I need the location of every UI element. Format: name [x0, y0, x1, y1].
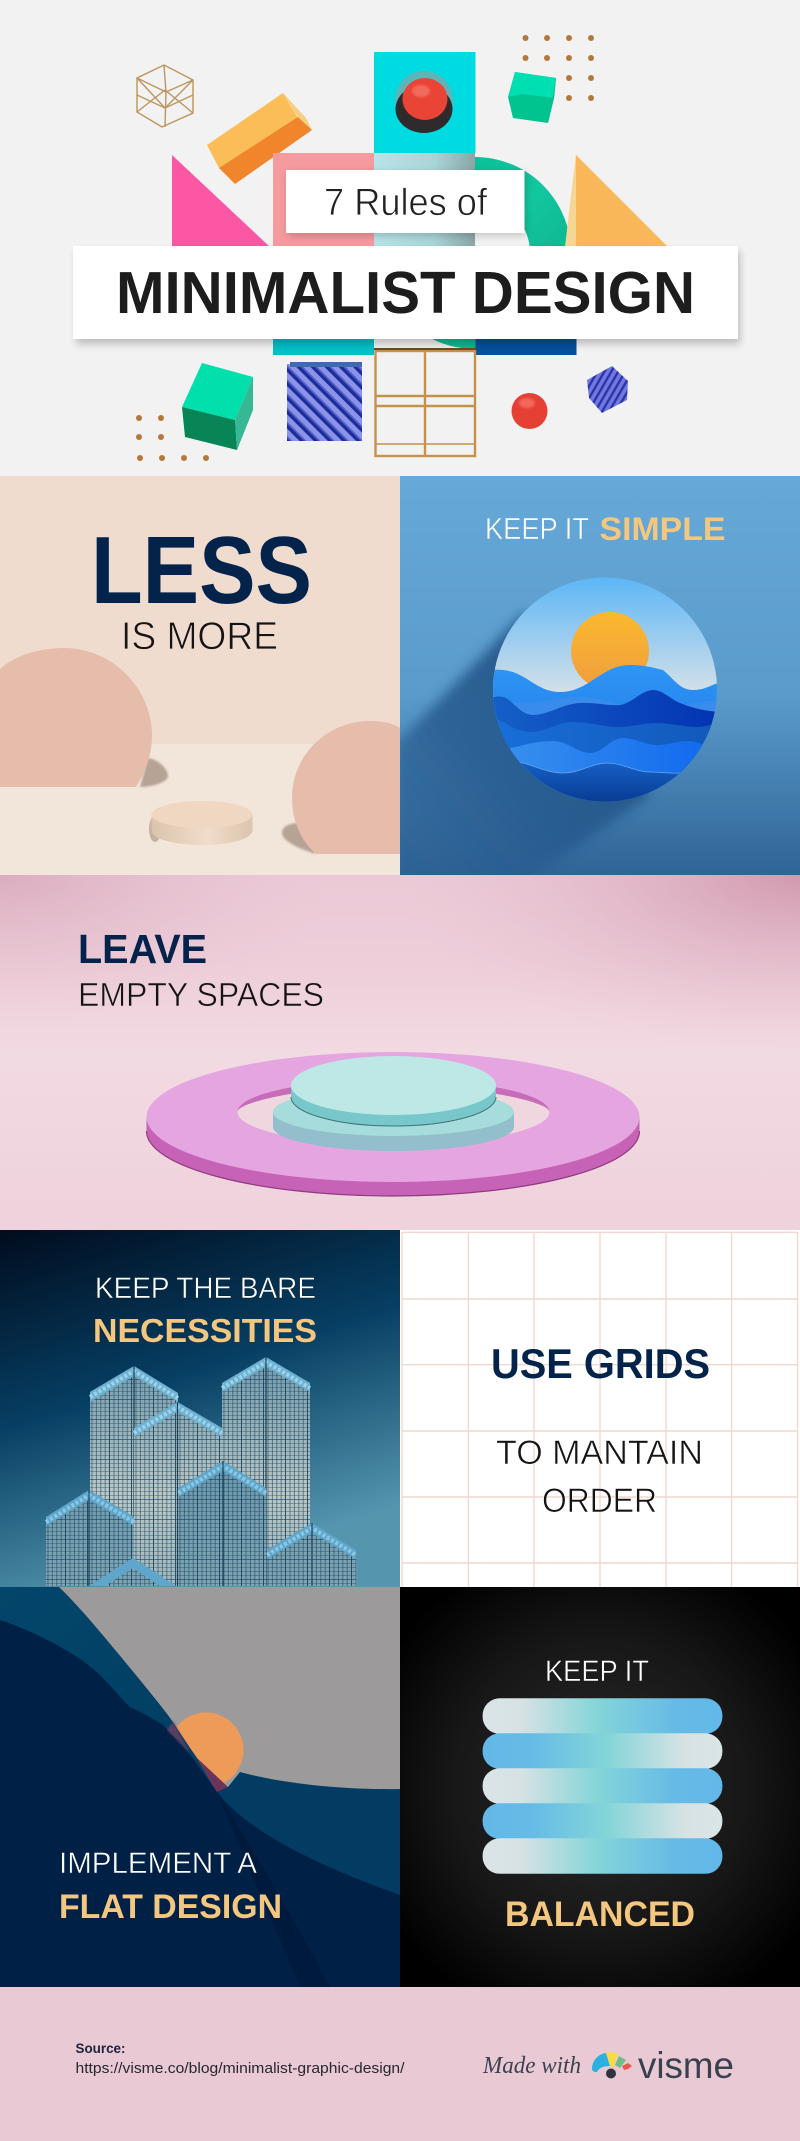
shadow: left dome — [140, 758, 168, 787]
icon: lower disc — [273, 1088, 514, 1151]
panel: use grids — [400, 1230, 800, 1587]
subtitle box — [286, 170, 526, 236]
panel: keep it simple — [395, 476, 800, 890]
heading: implement a: IMPLEMENT A — [59, 1847, 257, 1880]
panel: flat design — [0, 1587, 400, 1987]
heading: keep it: KEEP IT — [545, 1655, 649, 1688]
icon: green cube bottom — [182, 363, 253, 450]
icon: green cube top — [508, 72, 556, 123]
panel: hero header — [0, 0, 800, 476]
panel: less is more — [0, 476, 400, 875]
icon: gold dots bottom — [136, 415, 209, 461]
icon: upper disc — [291, 1056, 496, 1126]
icon: striped block — [287, 362, 362, 441]
heading: empty spaces: EMPTY SPACES — [78, 976, 324, 1013]
shape: sun overlap wedge — [197, 1758, 228, 1792]
illustration: skyscrapers — [46, 1357, 356, 1586]
shadow: long circle shadow — [395, 612, 650, 890]
chart: stacked bars — [483, 1698, 722, 1874]
icon: purple cube — [587, 366, 628, 413]
text: source url: https://visme.co/blog/minimalist-graphic-design/ — [76, 2061, 406, 2077]
text: made with: Made with — [482, 2053, 581, 2079]
icon: yellow triangle — [565, 155, 668, 247]
shadow: right dome — [282, 823, 316, 854]
icon: red ball — [512, 393, 548, 429]
heading: less: LESS — [91, 517, 312, 624]
panel: keep the bare necessities — [0, 1230, 400, 1587]
heading: balanced: BALANCED — [505, 1895, 695, 1934]
icon: teal lower block — [273, 339, 374, 355]
icon: visme logo — [592, 2052, 632, 2078]
icon: gold frame — [374, 349, 476, 456]
icon: right dome — [292, 721, 400, 854]
icon: gold wire hexagon — [137, 65, 193, 127]
heading: flat design: FLAT DESIGN — [59, 1888, 282, 1926]
icon: pink ring — [146, 1052, 640, 1196]
heading: necessities: NECESSITIES — [93, 1312, 317, 1349]
icon: pink square — [273, 153, 374, 247]
icon: glass square — [374, 153, 475, 247]
heading: is more: IS MORE — [121, 615, 278, 658]
heading: use grids: USE GRIDS — [491, 1340, 710, 1387]
icon: orange block — [207, 93, 312, 184]
icon: puck — [149, 801, 252, 845]
text: to mantain order — [496, 1434, 703, 1520]
icon: sunset circle — [490, 577, 720, 810]
title box — [73, 246, 740, 344]
text: source label: Source: — [76, 2040, 126, 2056]
panel: footer — [0, 1987, 800, 2141]
panel: leave empty spaces — [0, 875, 800, 1230]
heading: keep it simple — [485, 511, 726, 547]
icon: gold dots top — [522, 35, 594, 101]
icon: left dome — [0, 648, 152, 787]
shape: teal hill band — [0, 1587, 217, 1800]
shape: dark sliver — [217, 1792, 330, 1987]
heading: keep it simple: SIMPLE — [600, 511, 726, 547]
heading: keep the bare: KEEP THE BARE — [95, 1272, 316, 1305]
heading: leave: LEAVE — [78, 926, 207, 972]
subtitle box: 7 Rules of — [324, 182, 487, 224]
shape: teal lower wave — [190, 1772, 400, 1900]
shape: navy hill — [0, 1620, 400, 1987]
icon: blue lower block — [476, 339, 576, 355]
icon: cyan square with red ball — [374, 52, 476, 153]
heading: keep it simple: KEEP IT — [485, 511, 589, 546]
text: visme wordmark: visme — [638, 2045, 734, 2086]
panel: keep it balanced — [400, 1587, 800, 1987]
title box: MINIMALIST DESIGN — [116, 260, 695, 326]
text: to mantain order: TO MANTAIN — [496, 1434, 703, 1472]
shape: sun overlap sliver — [167, 1722, 190, 1753]
icon: orange sun — [168, 1712, 244, 1788]
text: to mantain order: ORDER — [542, 1482, 657, 1520]
icon: green ring — [379, 157, 571, 349]
icon: pink triangle — [172, 155, 270, 247]
